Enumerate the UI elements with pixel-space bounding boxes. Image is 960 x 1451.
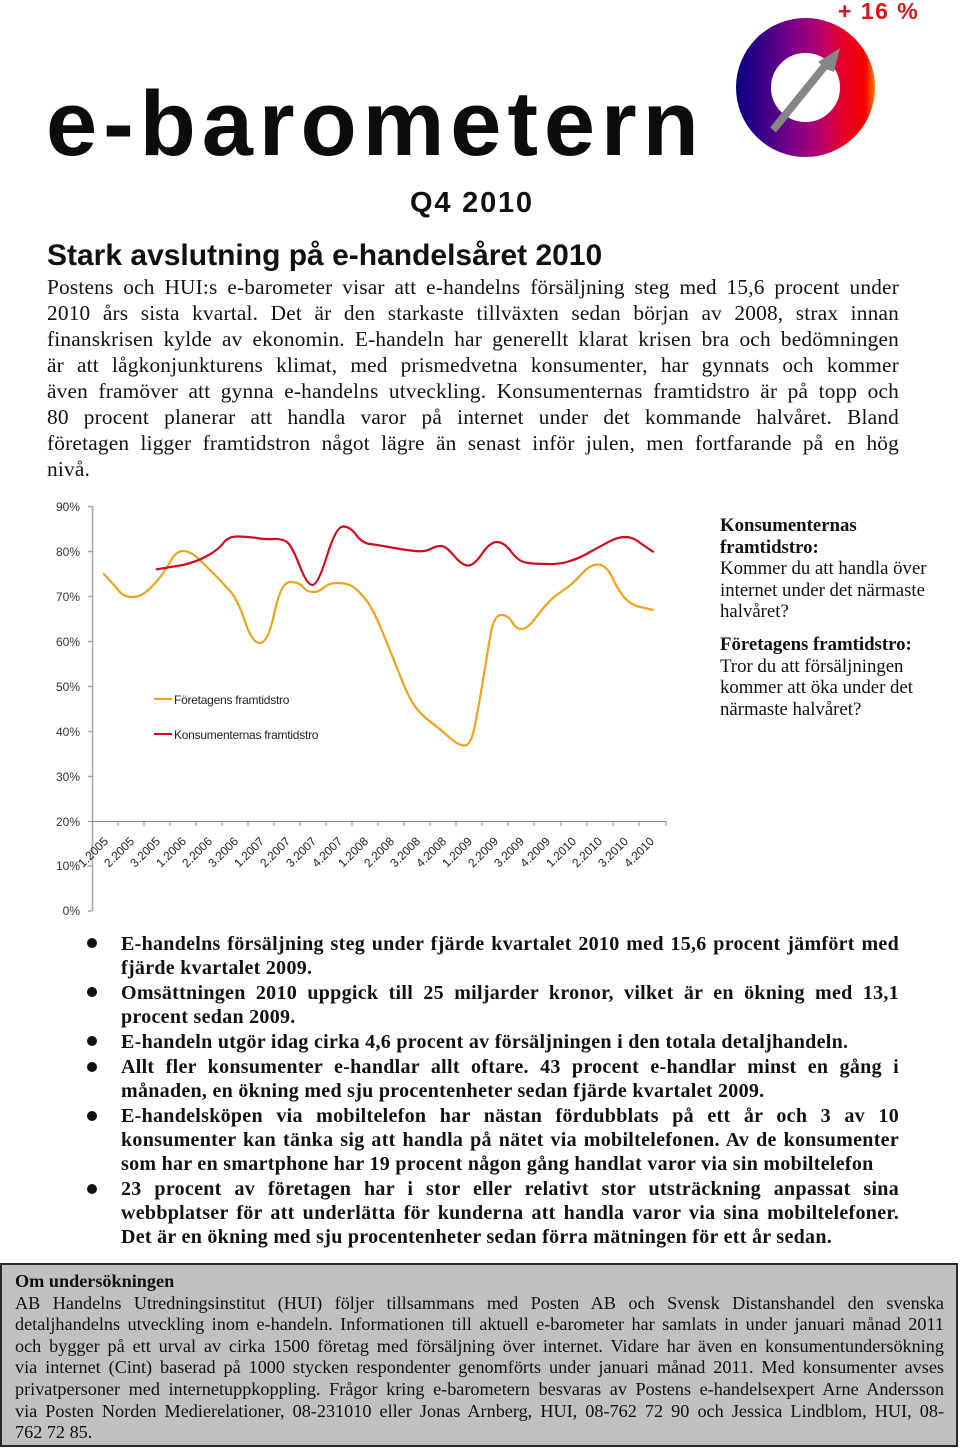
chart note: konsumenternas framtidstro: Konsumenternas bbox=[720, 515, 857, 536]
bullet list: webbplatser för att underlätta för kunderna att handla varor via sina mobiltelefoner. bbox=[121, 1202, 899, 1224]
x axis labels: 3.2008 bbox=[387, 834, 423, 870]
panel: om undersökningen: och bygger på ett urval av cirka 1500 företag med försäljning över internet. Vidare har även en konsumentundersökning bbox=[15, 1336, 944, 1356]
x axis labels: 2.2009 bbox=[465, 834, 501, 870]
bullet list: Det är en ökning med sju procentenheter sedan förra mätningen för ett år sedan. bbox=[121, 1226, 832, 1248]
chart note: konsumenternas framtidstro: halvåret? bbox=[720, 601, 789, 622]
bullet list: månaden, en ökning med sju procentenheter sedan fjärde kvartalet 2009. bbox=[121, 1080, 764, 1102]
y axis labels: 30% bbox=[56, 770, 80, 784]
panel heading: Om undersökningen bbox=[15, 1271, 174, 1291]
x axis labels: 1.2006 bbox=[153, 834, 189, 870]
x axis labels: 4.2008 bbox=[413, 834, 449, 870]
x axis labels: 1.2008 bbox=[335, 834, 371, 870]
y axis labels: 60% bbox=[56, 635, 80, 649]
intro text block: Postens och HUI:s e-barometer visar att e-handelns försäljning steg med 15,6 procent under bbox=[47, 275, 899, 299]
bullet list: Omsättningen 2010 uppgick till 25 miljarder kronor, vilket är en ökning med 13,1 bbox=[121, 982, 899, 1004]
x axis labels: 4.2007 bbox=[309, 834, 345, 870]
y axis labels: 0% bbox=[63, 904, 80, 918]
bullet list: E-handelns försäljning steg under fjärde kvartalet 2010 med 15,6 procent jämfört med bbox=[121, 933, 899, 955]
x axis labels: 1.2010 bbox=[543, 834, 579, 870]
heading: Stark avslutning på e-handelsåret 2010 bbox=[47, 239, 602, 272]
panel: om undersökningen: via Posten Norden Medierelationer, 08-231010 eller Jonas Arnberg, HUI, 08-762 72 90 och Jessica Lindblom, HUI, 08- bbox=[15, 1401, 944, 1421]
x axis labels: 1.2009 bbox=[439, 834, 475, 870]
y axis labels: 90% bbox=[56, 500, 80, 514]
chart note: företagens framtidstro: Tror du att försäljningen bbox=[720, 656, 903, 676]
intro text block: 80 procent planerar att handla varor på internet under det kommande halvåret. Bland bbox=[47, 405, 899, 429]
x axis labels: 4.2010 bbox=[621, 834, 657, 870]
legend bbox=[154, 693, 319, 742]
x axis labels: 2.2005 bbox=[101, 834, 137, 870]
intro text block bbox=[47, 275, 899, 481]
x axis labels: 2.2007 bbox=[257, 834, 293, 870]
y axis labels: 50% bbox=[56, 680, 80, 694]
x axis labels: 1.2007 bbox=[231, 834, 267, 870]
x axis labels: 2.2010 bbox=[569, 834, 605, 870]
chart note: företagens framtidstro bbox=[720, 634, 913, 720]
x axis labels: 4.2009 bbox=[517, 834, 553, 870]
x axis labels: 3.2005 bbox=[127, 834, 163, 870]
chart note: konsumenternas framtidstro: framtidstro: bbox=[720, 536, 819, 558]
bullet list: fjärde kvartalet 2009. bbox=[121, 957, 312, 979]
y axis labels: 40% bbox=[56, 725, 80, 739]
panel: om undersökningen bbox=[0, 1263, 958, 1447]
y axis labels: 70% bbox=[56, 590, 80, 604]
x axis labels: 2.2006 bbox=[179, 834, 215, 870]
chart note: konsumenternas framtidstro bbox=[720, 515, 927, 622]
title: e-barometern bbox=[46, 73, 705, 175]
x axis labels: 3.2010 bbox=[595, 834, 631, 870]
panel: om undersökningen: detaljhandelns utveckling inom e-handeln. Informationen till aktuell e-barometer har samlats in under januari månad 2011 bbox=[15, 1314, 944, 1334]
chart note: konsumenternas framtidstro: Kommer du att handla över bbox=[720, 558, 927, 579]
bullet list: procent sedan 2009. bbox=[121, 1006, 296, 1028]
subtitle: quarter: Q4 2010 bbox=[410, 187, 534, 219]
bullet list: konsumenter kan tänka sig att handla på nätet via mobiltelefonen. Av de konsumenter bbox=[121, 1129, 899, 1151]
bullet list: som har en smartphone har 19 procent någon gång handlat varor via sin mobiltelefon bbox=[121, 1153, 874, 1175]
x axis labels: 1.2005 bbox=[75, 834, 111, 870]
panel: om undersökningen: via internet (Cint) baserad på 1000 stycken respondenter genomförts under januari månad 2011. Med konsumenter avses bbox=[15, 1357, 944, 1377]
x axis labels: 2.2008 bbox=[361, 834, 397, 870]
series: företagens framtidstro bbox=[104, 551, 653, 746]
x axis labels: 3.2007 bbox=[283, 834, 319, 870]
y axis labels: 10% bbox=[56, 859, 80, 873]
icon: gradient ring with arrow bbox=[736, 18, 875, 157]
intro text block: nivå. bbox=[47, 457, 90, 481]
line chart bbox=[56, 500, 666, 918]
intro text block: även framöver att gynna e-handelns utveckling. Konsumenternas framtidstro är på topp och bbox=[47, 379, 899, 403]
bullet list: 23 procent av företagen har i stor eller relativt stor utsträckning anpassat sina bbox=[121, 1178, 899, 1200]
legend: Konsumenternas framtidstro bbox=[174, 728, 319, 742]
x axis labels: 3.2006 bbox=[205, 834, 241, 870]
series: konsumenternas framtidstro bbox=[157, 526, 653, 585]
intro text block: är att lågkonjunkturens klimat, med prismedvetna konsumenter, har gynnats och kommer bbox=[47, 353, 899, 377]
legend: Företagens framtidstro bbox=[174, 693, 290, 707]
chart note: företagens framtidstro: Företagens framtidstro: bbox=[720, 634, 912, 655]
chart note: konsumenternas framtidstro: internet under det närmaste bbox=[720, 580, 925, 600]
bullet list: E-handeln utgör idag cirka 4,6 procent av försäljningen i den totala detaljhandeln. bbox=[121, 1031, 848, 1053]
y axis labels: 80% bbox=[56, 545, 80, 559]
bullet list: E-handelsköpen via mobiltelefon har nästan fördubblats på ett år och 3 av 10 bbox=[121, 1105, 899, 1127]
intro text block: 2010 års sista kvartal. Det är den starkaste tillväxten sedan början av 2008, strax innan bbox=[47, 301, 899, 325]
bullet list: Allt fler konsumenter e-handlar allt oftare. 43 procent e-handlar minst en gång i bbox=[121, 1056, 899, 1078]
x axis labels: 3.2009 bbox=[491, 834, 527, 870]
panel: om undersökningen: AB Handelns Utredningsinstitut (HUI) följer tillsammans med Posten AB och Svensk Distanshandel den svenska bbox=[15, 1293, 944, 1313]
chart note: företagens framtidstro: kommer att öka under det bbox=[720, 677, 913, 698]
x axis labels bbox=[75, 834, 657, 870]
panel: om undersökningen: privatpersoner med internetuppkoppling. Frågor kring e-barometern besvaras av Postens e-handelsexpert Arne Andersson bbox=[15, 1379, 944, 1399]
intro text block: finanskrisen kylde av ekonomin. E-handeln har generellt klarat krisen bra och bedömningen bbox=[47, 327, 899, 351]
panel: om undersökningen: 762 72 85. bbox=[15, 1422, 92, 1442]
y axis labels: 20% bbox=[56, 815, 80, 829]
chart note: företagens framtidstro: närmaste halvåret? bbox=[720, 698, 861, 720]
y axis labels bbox=[56, 500, 80, 918]
intro text block: företagen ligger framtidstron något lägre än senast inför julen, men fortfarande på en hög bbox=[47, 431, 899, 455]
